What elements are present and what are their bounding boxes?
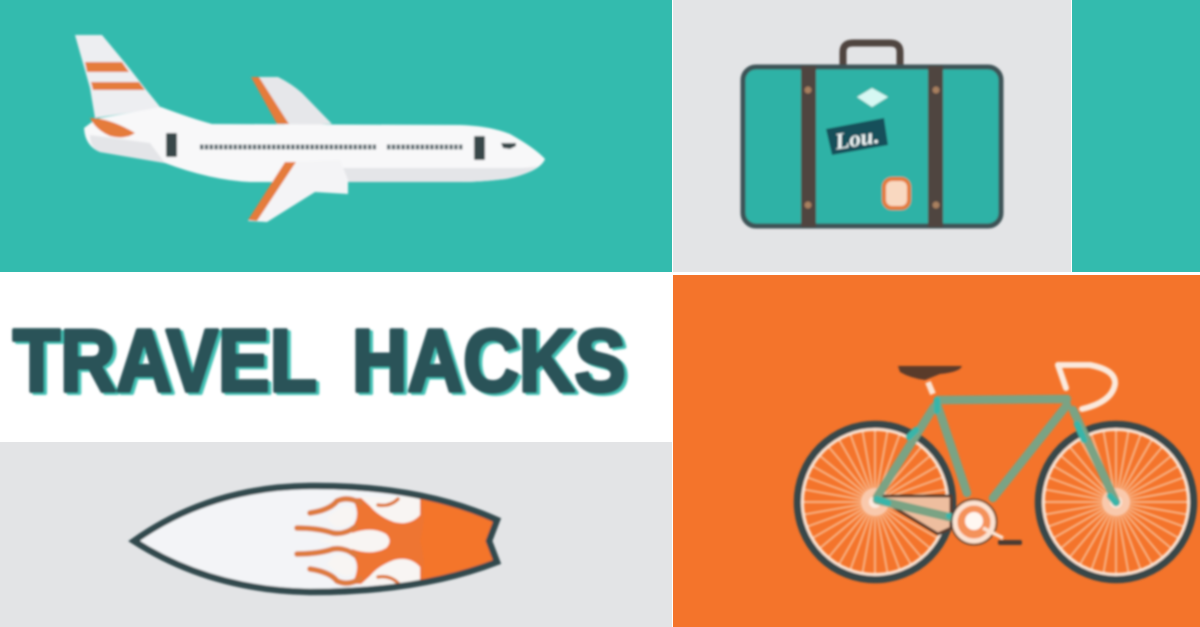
- bicycle rear wheel: [798, 424, 952, 580]
- suitcase handle: [843, 43, 900, 66]
- icon: bicycle: [798, 365, 1194, 580]
- title: HACKS: [355, 313, 629, 412]
- title: TRAVEL: [16, 313, 320, 412]
- airplane upper wing: [251, 77, 332, 126]
- panel: surfboard: [0, 442, 672, 627]
- icon: airplane: [75, 35, 545, 222]
- surfboard flames: [293, 494, 494, 588]
- title: TRAVEL: [13, 311, 317, 410]
- bicycle chain guard: [875, 496, 951, 534]
- sticker: orange tag: [884, 179, 909, 208]
- bicycle chainring: [955, 503, 993, 541]
- panel: title: [0, 274, 672, 440]
- bicycle frame joints: [877, 400, 1116, 518]
- sticker: label text: Lou.: [832, 123, 881, 154]
- surfboard flame tendrils: [297, 499, 360, 583]
- suitcase straps: [801, 66, 816, 227]
- airplane cabin windows: [200, 144, 376, 150]
- airplane stabiliser: [90, 118, 135, 137]
- panel: airplane: [0, 0, 672, 272]
- panel: suitcase: [673, 0, 1071, 272]
- airplane doors: [166, 133, 177, 157]
- panel: bicycle: [673, 275, 1200, 627]
- suitcase body: [743, 67, 1001, 226]
- airplane lower wing: [248, 160, 348, 222]
- sticker: label: [826, 118, 888, 155]
- bicycle frame: [877, 399, 1116, 518]
- title: HACKS: [352, 311, 626, 410]
- title: [13, 311, 629, 412]
- surfboard deck: [134, 486, 497, 592]
- bicycle saddle: [898, 366, 962, 380]
- surfboard flame highlights: [344, 528, 392, 554]
- icon: suitcase: [743, 43, 1001, 227]
- suitcase rivets: [804, 86, 812, 94]
- surfboard outline: [134, 486, 497, 592]
- bicycle seat post: [928, 382, 933, 394]
- bicycle crank and pedal: [983, 528, 1003, 538]
- icon: surfboard: [134, 486, 510, 592]
- sticker: diamond: [857, 88, 888, 107]
- bicycle handlebar: [1058, 365, 1115, 409]
- airplane cockpit window: [501, 143, 516, 149]
- airplane fuselage: [84, 107, 545, 182]
- panel: teal corner: [1072, 0, 1200, 272]
- bicycle front wheel: [1038, 424, 1194, 580]
- airplane tail fin: [75, 35, 161, 118]
